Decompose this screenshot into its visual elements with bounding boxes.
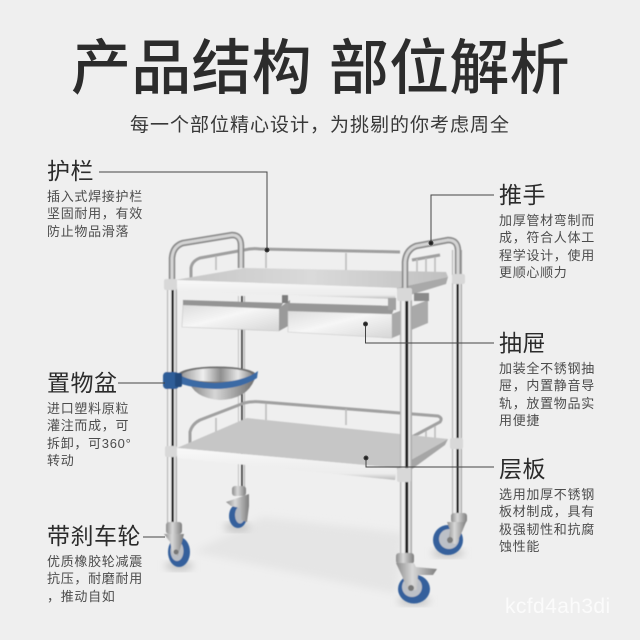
right handle: [405, 240, 458, 290]
callout: guard rail: 防止物品滑落: [47, 224, 129, 239]
callout: handle: 成，符合人体工: [499, 230, 595, 245]
callout: drawer: 抽屉: [499, 330, 546, 356]
lower left post: [167, 288, 177, 528]
trolley frame and shelves: [163, 235, 467, 604]
leader line: guard rail: [99, 172, 269, 252]
callout: casters: ，推动自如: [47, 589, 116, 604]
casters: [164, 486, 467, 604]
watermark: kcfd4ah3di: [505, 595, 611, 618]
callout: basin: 拆卸，可360°: [47, 436, 132, 451]
callout: casters: 优质橡胶轮减震: [47, 554, 143, 569]
callout: drawer: 屉，内置静音导: [499, 378, 595, 393]
callout: casters: [47, 523, 143, 604]
shelf clamps: [164, 274, 465, 482]
top shelf: [175, 268, 448, 299]
drawers: [182, 293, 429, 338]
leader line: shelf: [364, 456, 494, 467]
front right post: [400, 290, 412, 555]
callout: casters: 抗压，耐磨耐用: [47, 571, 143, 586]
callout: drawer: 轨，放置物品实: [499, 396, 595, 411]
callout: shelf: 板材制成，具有: [499, 504, 595, 519]
callout: handle: 更顺心顺力: [499, 265, 568, 280]
callout: drawer: 加装全不锈钢抽: [499, 361, 595, 376]
left handle: [172, 235, 241, 285]
caster: back left: [226, 486, 249, 528]
caster: front right: [396, 553, 437, 604]
bottom guard rail: [190, 402, 441, 452]
callout: basin: 进口塑料原粒: [47, 401, 129, 416]
top guard rail: [191, 249, 440, 279]
callout: casters: 带刹车轮: [47, 523, 141, 549]
leader line: handle: [429, 195, 494, 245]
callout: shelf: 极强韧性和抗腐: [499, 522, 595, 537]
callout: handle: 加厚管材弯制而: [499, 213, 595, 228]
leader line: basin: [118, 382, 165, 384]
callout: handle: 推手: [499, 182, 546, 208]
leader line: drawer: [364, 322, 494, 343]
callout: basin: [47, 370, 132, 468]
callout: guard rail: [47, 158, 143, 239]
basin: [163, 366, 258, 400]
callout: shelf: [499, 456, 595, 554]
floor shadow: [165, 517, 464, 605]
callout: guard rail: 插入式焊接护栏: [47, 189, 143, 204]
leader line: caster: [143, 536, 165, 538]
callout: guard rail: 护栏: [47, 158, 94, 184]
title: 产品结构 部位解析: [71, 35, 570, 102]
callout: basin: 转动: [47, 453, 74, 468]
callout: drawer: [499, 330, 595, 428]
rear right post: [452, 250, 462, 515]
bottom shelf: [177, 418, 448, 480]
callout: shelf: 选用加厚不锈钢: [499, 487, 595, 502]
caster: rear right: [433, 513, 467, 555]
callout: drawer: 用便捷: [499, 413, 540, 428]
callout: guard rail: 坚固耐用，有效: [47, 206, 143, 221]
callout: basin: 灌注而成，可: [47, 418, 129, 433]
back left post: [238, 296, 245, 491]
callout: shelf: 层板: [499, 456, 546, 482]
callout: handle: [499, 182, 595, 280]
callout: shelf: 蚀性能: [499, 539, 540, 554]
callout: handle: 程学设计，使用: [499, 248, 595, 263]
caster: front left: [164, 522, 190, 567]
subtitle: 每一个部位精心设计，为挑剔的你考虑周全: [130, 115, 510, 136]
callout: basin: 置物盆: [47, 370, 118, 396]
